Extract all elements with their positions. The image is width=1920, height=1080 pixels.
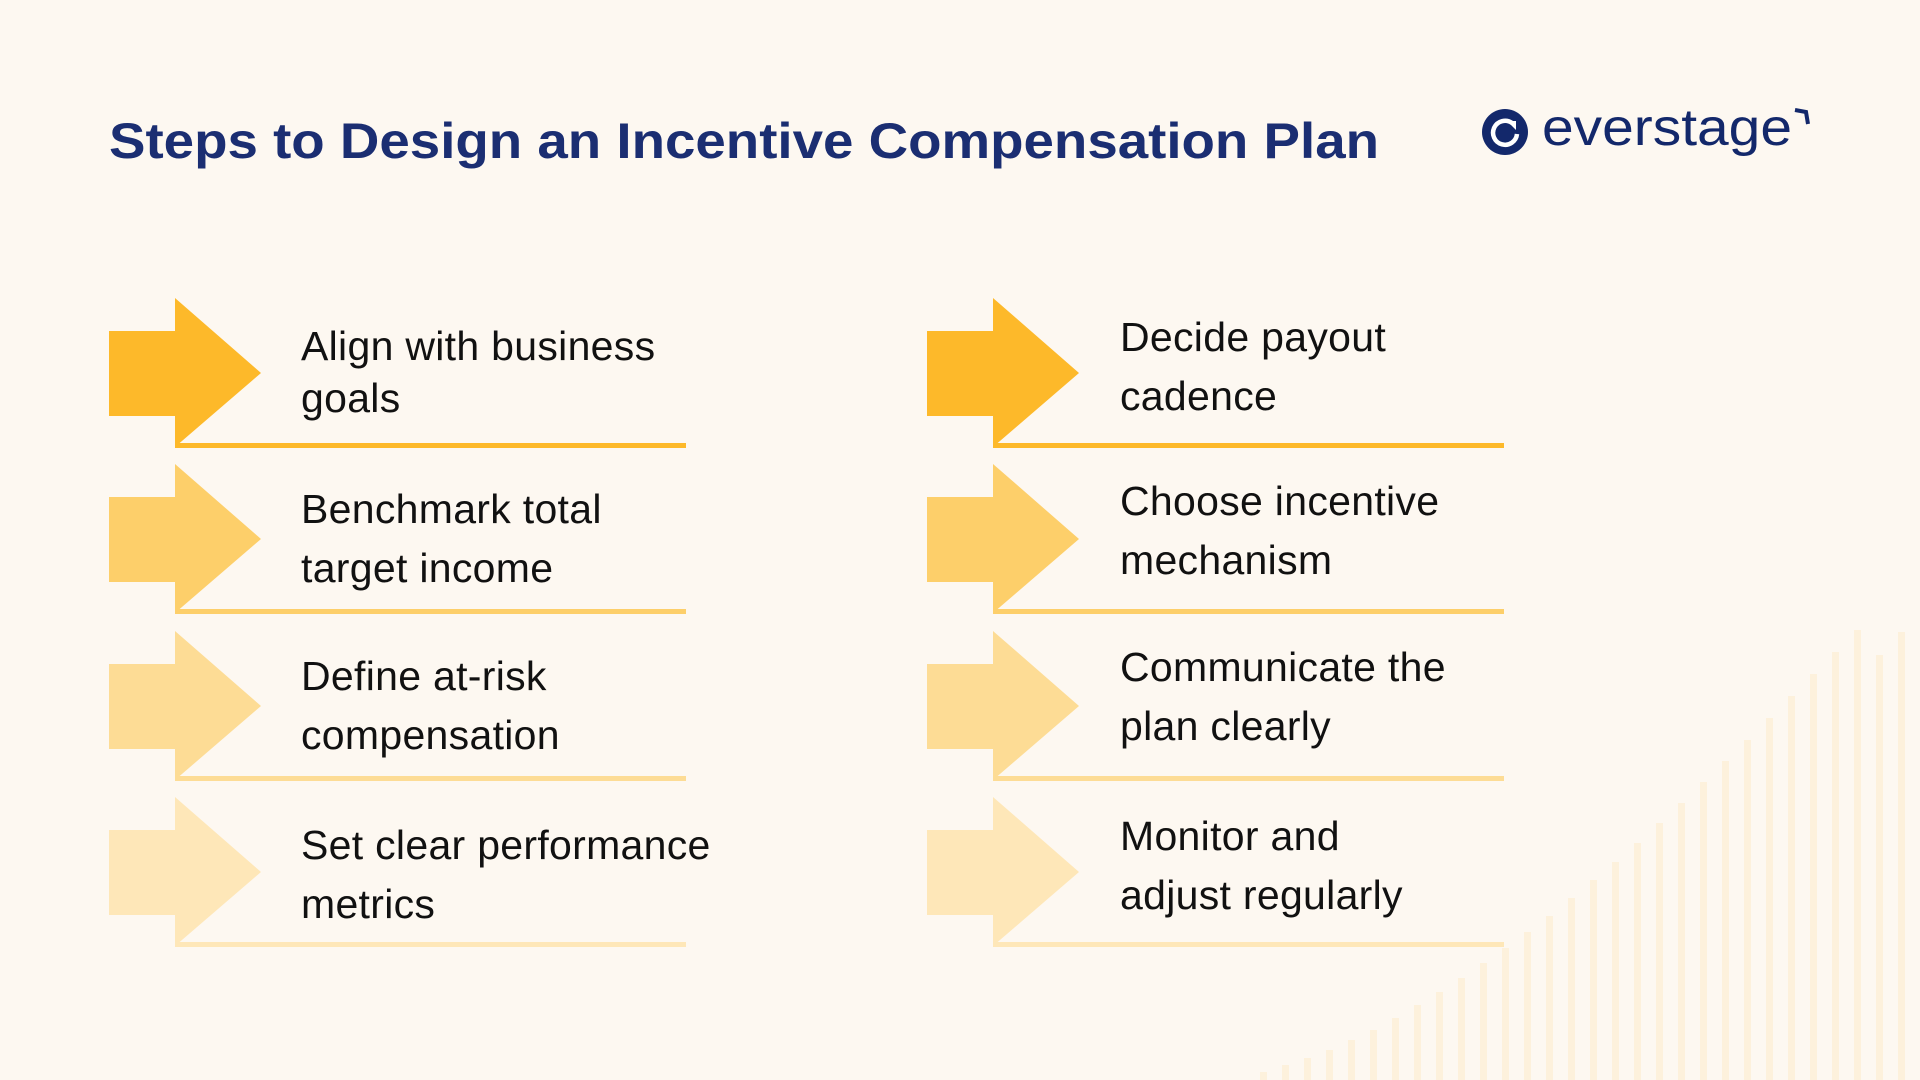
step 5 text xyxy=(1120,314,1386,419)
step 7 text: plan clearly xyxy=(1120,703,1331,749)
step 3 text: Define at-risk xyxy=(301,653,547,699)
logo: everstage xyxy=(1542,99,1792,157)
step 3 text xyxy=(301,653,560,758)
step 2 text: Benchmark total xyxy=(301,486,602,532)
step 7 text: Communicate the xyxy=(1120,644,1446,690)
step 5 text: Decide payout xyxy=(1120,314,1386,360)
arrow 8 xyxy=(927,797,1504,947)
step 5 text: cadence xyxy=(1120,373,1277,419)
step 1 text xyxy=(301,323,655,421)
step 4 text: metrics xyxy=(301,881,435,927)
step 8 text: adjust regularly xyxy=(1120,872,1403,918)
arrow 7 xyxy=(927,631,1504,781)
step 4 text xyxy=(301,822,711,927)
arrows column left xyxy=(109,298,686,947)
step 6 text xyxy=(1120,478,1439,583)
step 3 text: compensation xyxy=(301,712,560,758)
step 1 text: goals xyxy=(301,375,401,421)
step 7 text xyxy=(1120,644,1446,749)
background bars xyxy=(1260,630,1905,1080)
arrow 6 xyxy=(927,464,1504,614)
arrow 2 xyxy=(109,464,686,614)
arrow 5 xyxy=(927,298,1504,448)
arrow 3 xyxy=(109,631,686,781)
step 8 text: Monitor and xyxy=(1120,813,1340,859)
step 4 text: Set clear performance xyxy=(301,822,711,868)
title: Steps to Design an Incentive Compensation Plan xyxy=(109,113,1379,169)
arrow 1 xyxy=(109,298,686,448)
step 6 text: Choose incentive xyxy=(1120,478,1439,524)
step 2 text xyxy=(301,486,602,591)
step 8 text xyxy=(1120,813,1403,918)
step 1 text: Align with business xyxy=(301,323,655,369)
arrows column right xyxy=(927,298,1504,947)
step 2 text: target income xyxy=(301,545,553,591)
arrow 4 xyxy=(109,797,686,947)
step 6 text: mechanism xyxy=(1120,537,1332,583)
